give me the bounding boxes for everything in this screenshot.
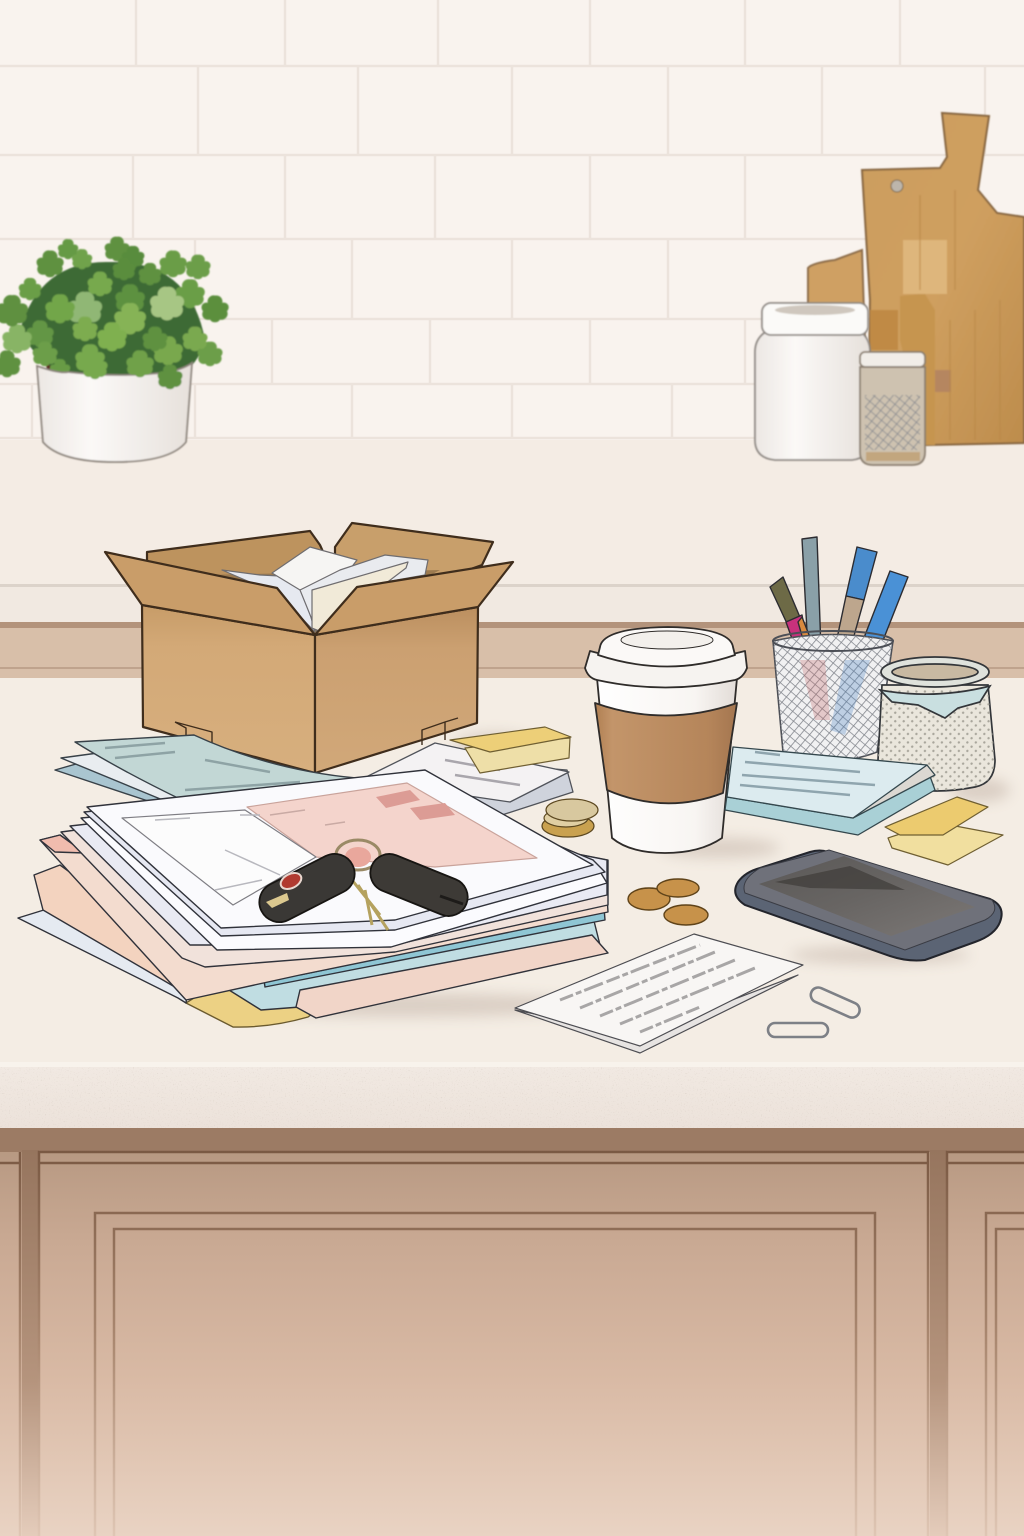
top sheet xyxy=(87,770,593,928)
coins by cup xyxy=(542,799,598,837)
smartphone xyxy=(735,850,1002,960)
background wall with tiles xyxy=(0,0,1024,445)
plant leaves xyxy=(0,237,229,389)
large paper stack xyxy=(18,770,608,1027)
potted plant xyxy=(0,237,229,462)
bottom pink sheet xyxy=(296,935,608,1018)
box interior xyxy=(200,570,440,635)
cutting boards xyxy=(808,113,1024,445)
back left papers xyxy=(55,735,356,803)
box right face xyxy=(315,607,478,773)
plant pot xyxy=(37,363,192,462)
cup lid rim xyxy=(585,651,747,688)
left key fob xyxy=(252,847,362,929)
cup lid top xyxy=(598,627,735,666)
yellow folder xyxy=(186,975,330,1027)
pink sheet xyxy=(40,835,608,1000)
back middle papers xyxy=(360,743,573,815)
cup sleeve xyxy=(595,703,737,803)
small glass jar xyxy=(860,352,925,465)
glass jars xyxy=(755,303,925,465)
receipt xyxy=(515,934,803,1053)
box front flaps xyxy=(105,552,315,635)
small knit jar xyxy=(878,657,995,791)
paper clips xyxy=(768,985,862,1037)
pens xyxy=(770,537,908,650)
counter shadows xyxy=(210,733,1010,1017)
pale sheet xyxy=(61,800,608,967)
front cutting board xyxy=(862,113,1024,445)
main counter top xyxy=(0,678,1024,1129)
back counter xyxy=(0,440,1024,680)
pen holder xyxy=(770,537,908,761)
coffee cup xyxy=(585,627,747,853)
lower cabinets xyxy=(0,1128,1024,1536)
right key fob xyxy=(365,848,473,922)
white sheet xyxy=(81,790,607,950)
back flaps xyxy=(147,531,340,590)
sticky notes right xyxy=(885,797,1003,865)
left blue sheet xyxy=(18,905,190,1003)
cardboard box xyxy=(105,523,513,773)
lavender sheet upper xyxy=(84,780,605,936)
pink invoice xyxy=(247,783,537,867)
cup body xyxy=(597,678,737,853)
papers in box xyxy=(222,547,428,632)
lower teal sheets xyxy=(229,905,600,1010)
box left face xyxy=(142,605,315,773)
notebook xyxy=(725,747,935,835)
mesh cup xyxy=(773,634,893,761)
sticky notes back xyxy=(450,727,571,773)
receipt text scribbles xyxy=(560,945,755,1032)
large white jar xyxy=(755,303,870,460)
rear cutting board xyxy=(808,250,868,445)
white form xyxy=(122,810,316,905)
car keys xyxy=(252,840,473,930)
left peach sheets xyxy=(34,865,190,990)
upper teal sheet xyxy=(260,895,605,987)
lavender sheet xyxy=(70,800,607,945)
coins on counter xyxy=(628,879,708,925)
